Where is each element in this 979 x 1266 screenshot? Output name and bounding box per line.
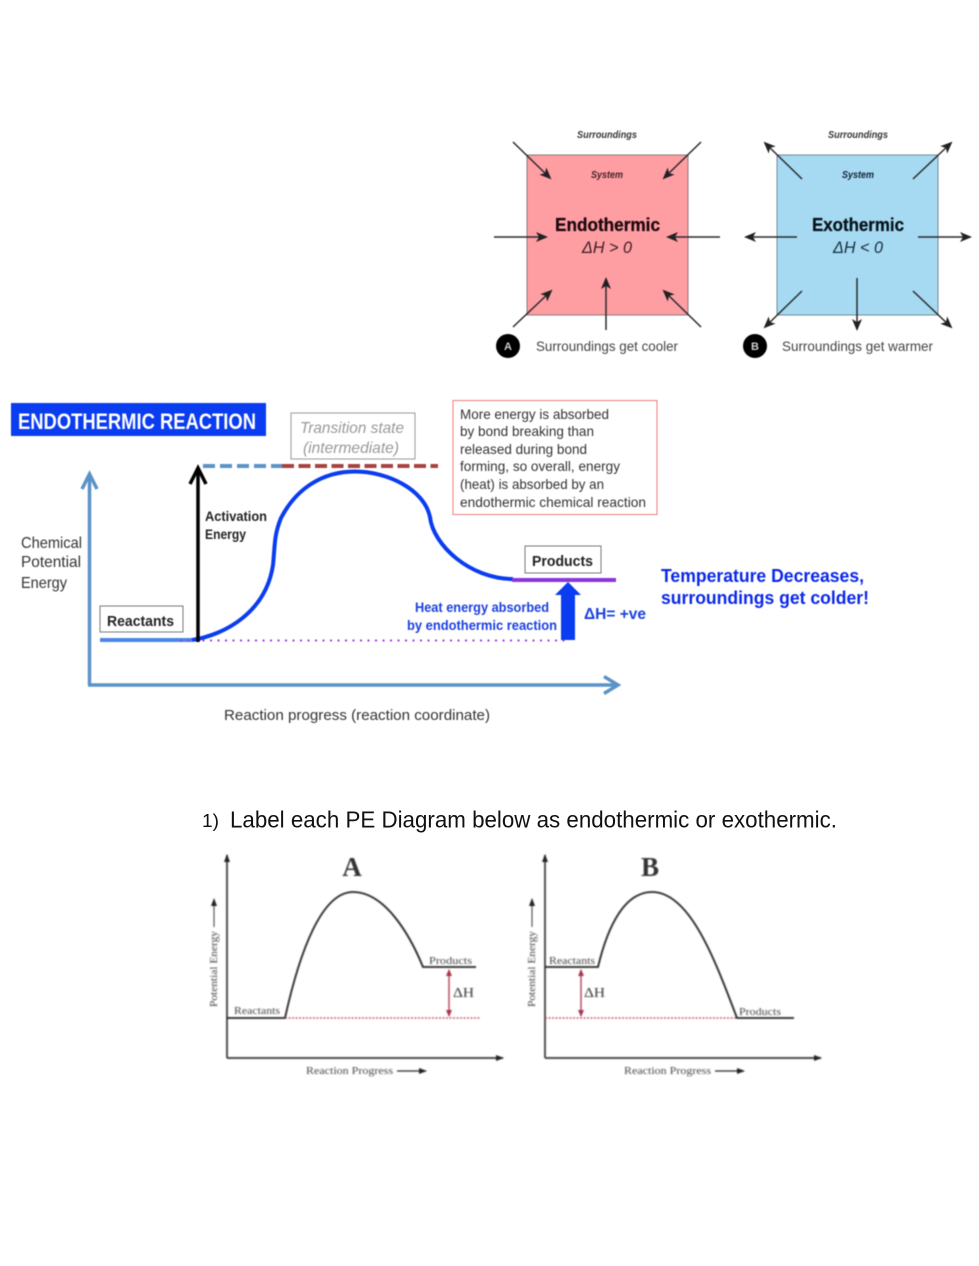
outward arrows [746,143,970,329]
endothermic square [527,155,688,315]
energy curve [192,472,513,640]
activation energy label: Energy [205,527,246,542]
title banner [11,403,266,436]
transition state box [291,413,415,459]
diagram A y axis label: Potential Energy [209,931,220,1007]
panel: endothermic reaction energy diagram [11,400,869,724]
transition state box: Transition state [300,420,404,437]
explanation box: released during bond [460,441,587,457]
diagram A x axis label [306,1066,426,1077]
title banner: ENDOTHERMIC REACTION [18,409,256,434]
reactants dotted baseline [180,640,566,642]
diagram B title: B [641,852,659,882]
y axis label: Chemical [21,535,82,552]
caption: surroundings get warmer: Surroundings get warmer [782,338,933,354]
diagram A delta H arrow [448,970,450,1016]
badge B [743,334,767,358]
diagram A curve and levels [227,892,476,1018]
endothermic surroundings label: Surroundings [577,130,637,141]
explanation box: More energy is absorbed [460,406,609,422]
endothermic system label: System [591,170,623,181]
diagram B axes [545,855,821,1058]
panel: exothermic system box [743,130,970,358]
products level [512,578,616,582]
diagram A y axis label [209,899,220,1007]
panel: PE diagram A [209,852,503,1077]
inward arrows [494,142,720,330]
diagram B x axis label: Reaction Progress [624,1066,711,1077]
transition level dashes [203,464,438,468]
panel: PE diagram B [527,852,821,1077]
caption: surroundings get cooler: Surroundings get cooler [536,338,678,354]
badge B: B [751,341,759,353]
delta H label: ΔH= +ve [584,606,646,623]
x axis label: Reaction progress (reaction coordinate) [224,707,490,724]
diagram A products label: Products [429,956,472,967]
badge A: A [504,341,512,353]
explanation box [453,400,657,514]
temperature callout: surroundings get colder! [661,588,869,608]
diagram B products label: Products [739,1007,781,1018]
endothermic heading: Endothermic [555,215,660,235]
diagram B y axis label [527,899,538,1007]
diagram B delta H label: ΔH [584,986,605,1001]
explanation box: forming, so overall, energy [460,458,620,474]
y axis label: Potential [21,554,81,571]
diagram B reactants label: Reactants [549,956,595,967]
temperature callout [661,566,869,608]
panel: endothermic system box [494,130,720,358]
exothermic enthalpy sign: ΔH < 0 [832,238,884,257]
exothermic square [777,155,938,315]
diagram A dotted baseline [285,1017,481,1019]
exothermic system label: System [842,170,874,181]
products box [525,546,601,573]
question text: 1) [202,811,219,831]
activation energy arrow [190,468,206,642]
reactants level [100,638,192,642]
explanation box: by bond breaking than [460,423,594,439]
transition state box: (intermediate) [303,440,399,457]
temperature callout: Temperature Decreases, [661,566,864,586]
explanation box: (heat) is absorbed by an [460,476,604,492]
explanation box: endothermic chemical reaction [460,494,646,510]
exothermic heading: Exothermic [812,215,904,235]
enthalpy arrow [555,582,581,640]
activation energy label [205,509,267,542]
heat absorbed label [407,600,557,633]
endothermic enthalpy sign: ΔH > 0 [581,238,633,257]
diagram A axes [227,855,503,1058]
diagram B y axis label: Potential Energy [527,931,538,1007]
question text: Label each PE Diagram below as endothermic or exothermic. [230,806,837,832]
heat absorbed label: by endothermic reaction [407,618,557,633]
diagram B dotted baseline [545,1017,737,1019]
diagram B delta H arrow [580,970,582,1016]
reactants box: Reactants [107,613,174,630]
diagram B curve and levels [545,892,794,1018]
diagram A reactants label: Reactants [234,1006,280,1017]
heat absorbed label: Heat energy absorbed [415,600,549,615]
products box: Products [532,553,593,570]
reactants box [100,606,183,632]
diagram A delta H label: ΔH [453,986,474,1001]
badge A [496,334,520,358]
diagram A title: A [342,852,362,882]
diagram B x axis label [624,1066,744,1077]
diagram A x axis label: Reaction Progress [306,1066,393,1077]
y axis label [21,535,82,592]
activation energy label: Activation [205,509,267,524]
axes [82,474,618,694]
exothermic surroundings label: Surroundings [828,130,888,141]
y axis label: Energy [21,575,67,592]
